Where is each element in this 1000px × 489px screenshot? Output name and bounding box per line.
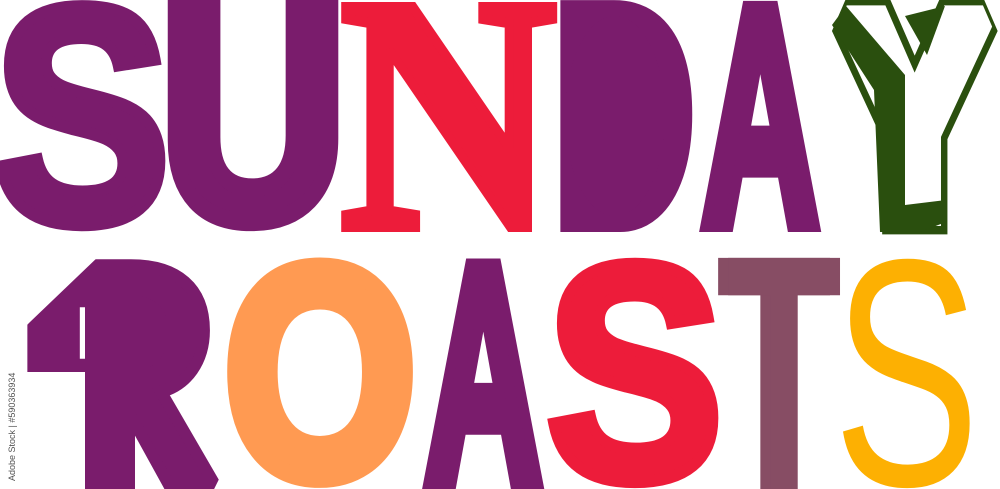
- stock credit, vertical: Adobe Stock | #590363934: [7, 373, 17, 481]
- second line: ROASTS: [14, 185, 980, 489]
- first line: SUNDAY: [0, 0, 986, 304]
